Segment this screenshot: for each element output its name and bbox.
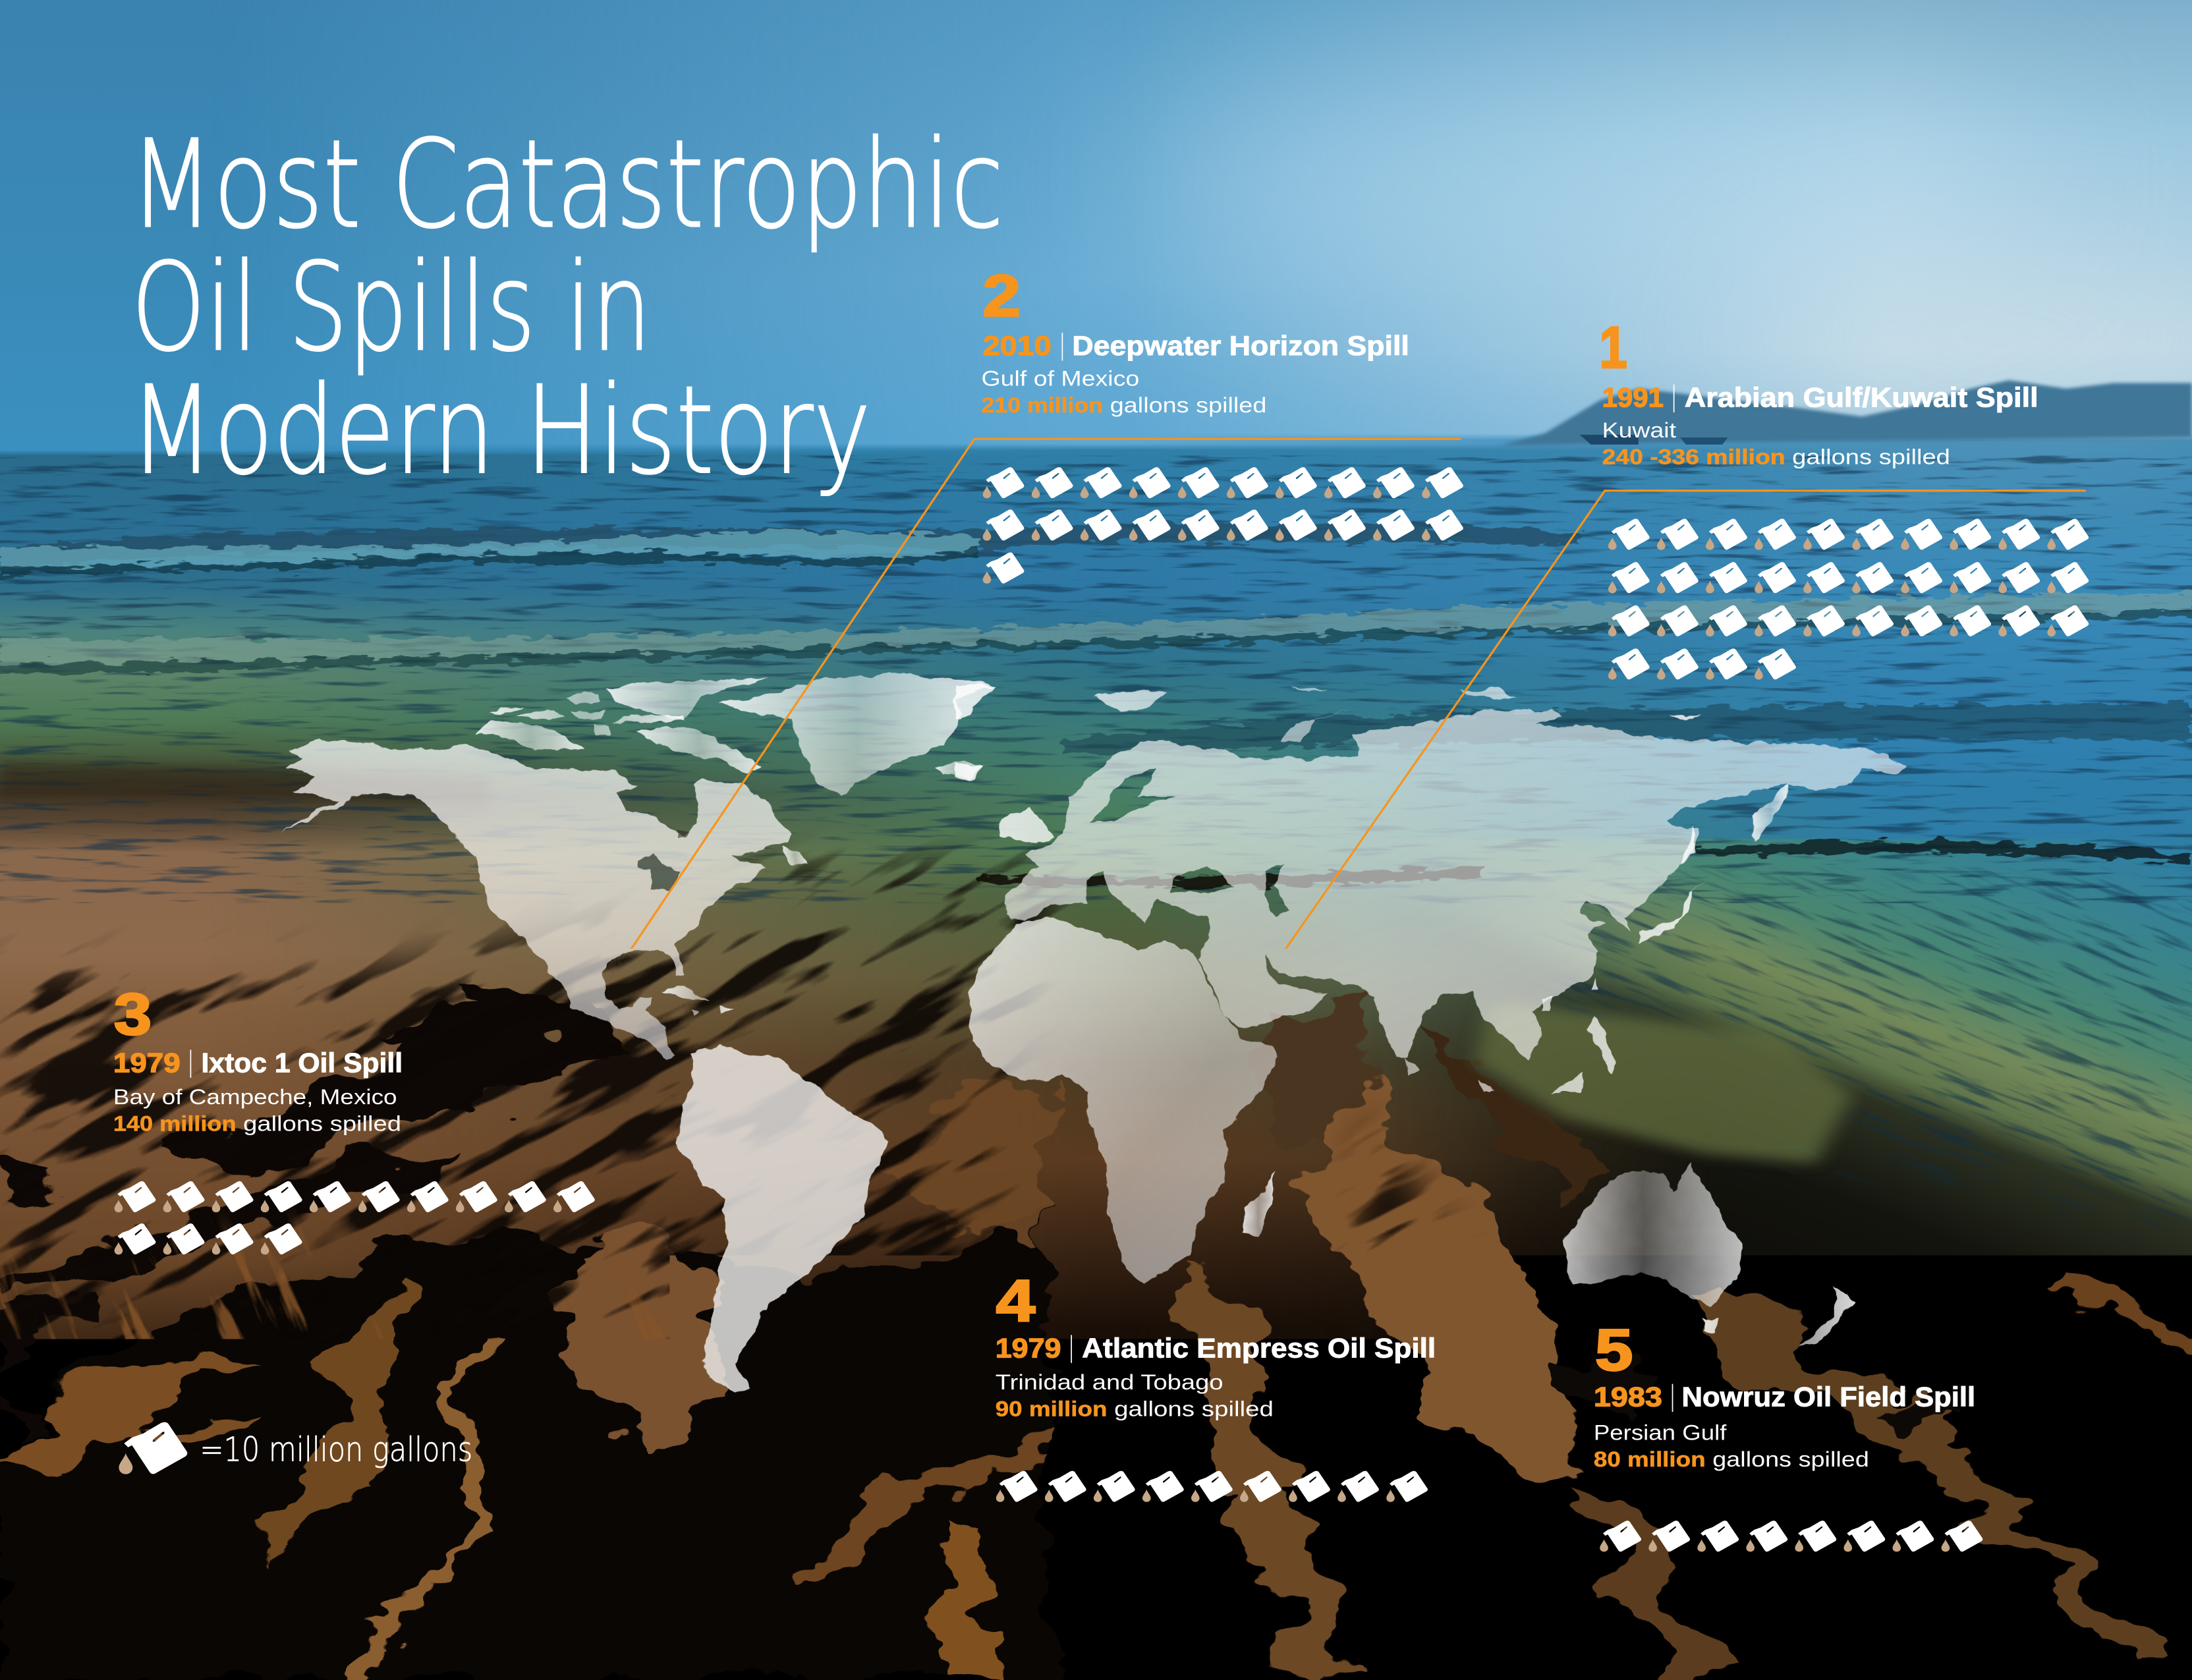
map: Eurasia — [955, 686, 1907, 1161]
map: North America and Arctic — [279, 674, 994, 1059]
year and name: Arabian Gulf/Kuwait Spill — [1685, 382, 2038, 412]
leader line: spill 5 — [1368, 1064, 2076, 1492]
icons: 9 jugs — [996, 1471, 1428, 1502]
volume: 140 million — [113, 1111, 237, 1136]
year and name: 1991 — [1602, 382, 1664, 412]
volume — [1602, 444, 1950, 468]
volume: 240 -336 million — [1602, 444, 1785, 468]
volume: gallons spilled — [243, 1111, 401, 1136]
legend text: =10 million gallons — [200, 1430, 472, 1469]
location: Bay of Campeche, Mexico — [113, 1084, 397, 1109]
panel: spill 5 Nowruz — [1594, 1316, 1982, 1552]
location: Kuwait — [1602, 418, 1676, 442]
icons: 34 jugs — [1608, 518, 2089, 680]
panel: spill 3 Ixtoc 1 — [113, 981, 595, 1254]
world map — [279, 674, 1907, 1392]
volume: gallons spilled — [1114, 1396, 1274, 1420]
title: Modern History — [130, 360, 871, 501]
volume — [982, 393, 1266, 417]
rank number: 3 — [114, 981, 152, 1047]
location: Trinidad and Tobago — [996, 1370, 1223, 1394]
volume: gallons spilled — [1792, 444, 1950, 468]
year and name: Nowruz Oil Field Spill — [1682, 1382, 1975, 1413]
volume: 90 million — [996, 1396, 1107, 1420]
year and name: 1983 — [1594, 1382, 1662, 1413]
location: Gulf of Mexico — [982, 366, 1139, 391]
legend — [119, 1422, 472, 1474]
volume: 210 million — [982, 393, 1103, 417]
rank number: 2 — [983, 263, 1021, 329]
icons: 21 jugs — [983, 467, 1463, 584]
year and name: Ixtoc 1 Oil Spill — [202, 1048, 403, 1078]
location: Persian Gulf — [1594, 1420, 1727, 1444]
title: Most Catastrophic — [130, 114, 1003, 256]
panel: spill 2 Deepwater Horizon — [982, 263, 1463, 584]
year and name — [113, 1048, 403, 1078]
oil slick shapes — [0, 839, 2192, 1680]
title: Oil Spills in — [131, 237, 652, 378]
leader line: spill 4 — [780, 1051, 1475, 1443]
rank number: 1 — [1599, 314, 1627, 380]
icons: 14 jugs — [115, 1181, 595, 1254]
panel: spill 4 Atlantic Empress — [996, 1268, 1436, 1502]
icons: 8 jugs — [1600, 1521, 1982, 1552]
rank number: 5 — [1595, 1316, 1633, 1382]
year and name: Deepwater Horizon Spill — [1072, 331, 1409, 361]
volume: 80 million — [1594, 1447, 1706, 1471]
panel: spill 1 Arabian Gulf — [1599, 314, 2089, 680]
year and name: 1979 — [996, 1333, 1061, 1363]
volume — [113, 1111, 401, 1136]
volume: gallons spilled — [1110, 393, 1266, 417]
volume — [1594, 1447, 1869, 1471]
map: Australia and New Zealand — [1561, 1163, 1856, 1345]
leader line: spill 2 — [618, 439, 1461, 968]
leader line: spill 1 — [1278, 491, 2086, 961]
year and name: Atlantic Empress Oil Spill — [1082, 1333, 1436, 1363]
location markers — [609, 951, 1378, 1073]
leader line: spill 3 — [113, 1055, 689, 1158]
map: South America — [677, 1044, 889, 1392]
title — [130, 114, 1003, 501]
volume: gallons spilled — [1712, 1447, 1869, 1471]
rank number: 4 — [996, 1268, 1036, 1333]
year and name: 1979 — [113, 1048, 181, 1078]
year and name: 2010 — [983, 331, 1052, 361]
map: Africa — [968, 918, 1277, 1285]
volume — [996, 1396, 1274, 1420]
icon: oil jug — [119, 1422, 187, 1474]
